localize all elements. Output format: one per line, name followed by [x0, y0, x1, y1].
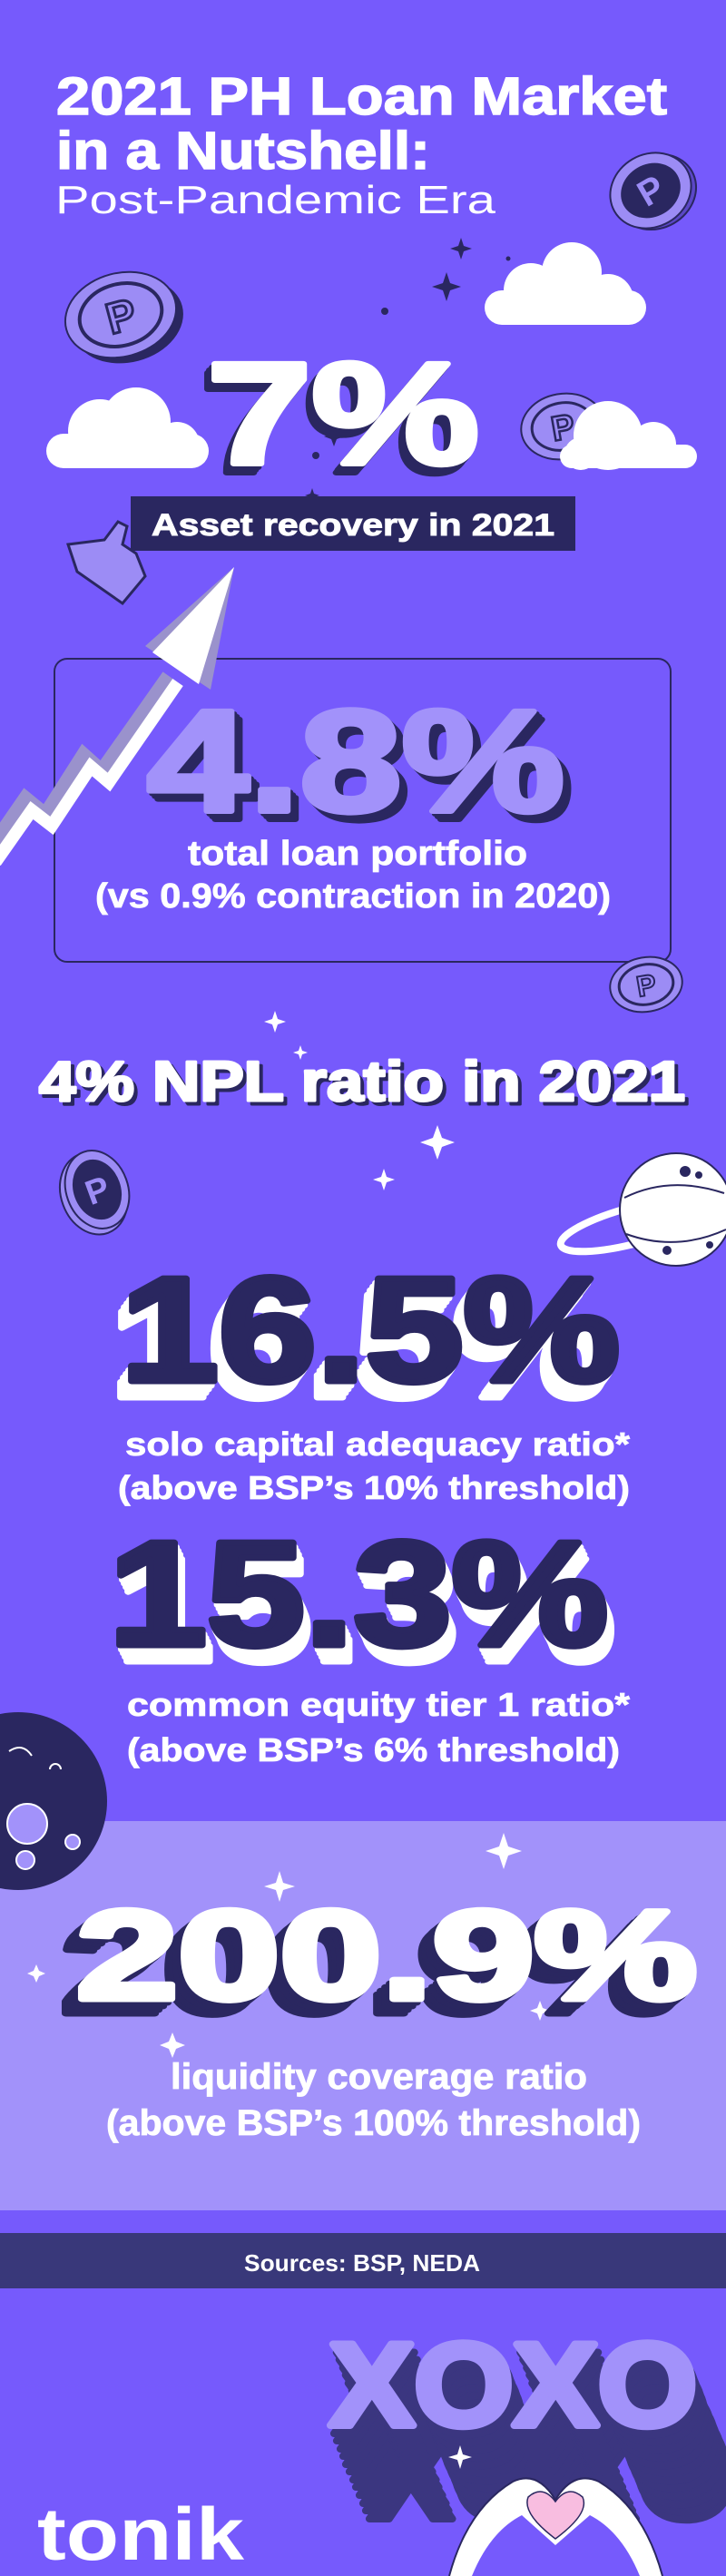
- title: [55, 67, 667, 222]
- XOXO: XOXO: [352, 2373, 720, 2505]
- big stat: 15.3%: 15.3%: [109, 1511, 608, 1677]
- big stat: 16.5%: 16.5%: [118, 1251, 617, 1417]
- big stat: 16.5%: 16.5%: [115, 1255, 614, 1421]
- XOXO: XOXO: [348, 2365, 716, 2497]
- XOXO: [329, 2318, 726, 2544]
- XOXO: XOXO: [355, 2380, 722, 2512]
- icon: sparkles: [264, 1011, 455, 1190]
- big stat: 4.8%: 4.8%: [155, 688, 573, 850]
- title: in a Nutshell:: [56, 122, 430, 181]
- big stat: 4.8%: 4.8%: [150, 682, 567, 845]
- icon: coin left: [55, 259, 193, 377]
- panel: loan portfolio box: [54, 659, 671, 962]
- text: liquidity: (above BSP’s 100% threshold): [106, 2103, 641, 2143]
- label: asset recovery: [131, 496, 575, 551]
- big stat: 16.5%: 16.5%: [121, 1247, 620, 1413]
- sources bar: Sources: BSP, NEDA: [244, 2249, 480, 2277]
- text: CET1: (above BSP’s 6% threshold): [127, 1731, 620, 1768]
- text: solo CAR: (above BSP’s 10% threshold): [118, 1469, 630, 1506]
- big stat: 200.9%: 200.9%: [64, 1895, 684, 2037]
- icon: coin left tilted: [48, 1141, 142, 1244]
- icon: coin bottom right: P: [634, 967, 659, 1004]
- big stat: 200.9%: 200.9%: [73, 1887, 693, 2030]
- XOXO: XOXO: [336, 2334, 703, 2466]
- big stat: 16.5%: 16.5%: [113, 1259, 612, 1425]
- icon: cloud right top: [485, 242, 646, 325]
- big stat: 7%: 7%: [207, 332, 479, 495]
- text: CET1: common equity tier 1 ratio*: [127, 1686, 630, 1723]
- icon: moon: [0, 1712, 107, 1890]
- icon: cloud small right: [560, 401, 697, 470]
- text: loan portfolio: (vs 0.9% contraction in 2020): [95, 877, 611, 916]
- XOXO: XOXO: [333, 2326, 701, 2459]
- title: Post-Pandemic Era: [55, 178, 496, 222]
- icon: thumbs up: [68, 522, 145, 603]
- XOXO: XOXO: [362, 2396, 726, 2529]
- XOXO: XOXO: [339, 2342, 707, 2474]
- arrow: growth: [0, 567, 234, 862]
- big stat: 15.3%: 15.3%: [113, 1519, 612, 1685]
- XOXO: XOXO: [329, 2318, 697, 2451]
- icon: coin left tilted: P: [81, 1170, 115, 1213]
- title: 2021 PH Loan Market: [56, 67, 667, 126]
- icon: coin middle right: P: [548, 407, 577, 449]
- logo: tonik: tonik: [37, 2493, 244, 2576]
- XOXO: XOXO: [358, 2388, 726, 2521]
- XOXO: XOXO: [342, 2349, 710, 2482]
- label: asset recovery: Asset recovery in 2021: [152, 508, 554, 543]
- text: loan portfolio: total loan portfolio: [188, 835, 527, 873]
- big stat: 4.8%: 4.8%: [147, 680, 564, 842]
- heading: NPL ratio: 4% NPL ratio in 2021: [39, 1051, 685, 1113]
- big stat: 7%: 7%: [204, 336, 476, 498]
- big stat: 4.8%: 4.8%: [152, 685, 570, 847]
- XOXO: XOXO: [365, 2404, 726, 2536]
- text: loan portfolio: [95, 835, 611, 916]
- icon: coin left: P: [101, 290, 142, 344]
- text: solo CAR: solo capital adequacy ratio*: [125, 1425, 630, 1463]
- text: CET1: [127, 1686, 630, 1768]
- icon: coin bottom right: [605, 952, 687, 1017]
- icon: coin top right: [596, 136, 710, 246]
- big stat: 15.3%: 15.3%: [114, 1523, 613, 1689]
- icon: sparkles near title: [305, 238, 510, 503]
- icon: sparkles band: [27, 1833, 550, 2058]
- big stat: 15.3%: 15.3%: [111, 1515, 610, 1681]
- text: liquidity: liquidity coverage ratio: [171, 2057, 587, 2097]
- big stat: 15.3%: 15.3%: [116, 1527, 615, 1693]
- big stat: 7%: 7%: [201, 338, 474, 501]
- XOXO: XOXO: [345, 2357, 712, 2490]
- big stat: 7%: 7%: [200, 341, 472, 504]
- icon: planet: [556, 1153, 726, 1266]
- XOXO: XOXO: [368, 2412, 726, 2544]
- big stat: 16.5%: 16.5%: [110, 1263, 609, 1429]
- text: solo CAR: [118, 1425, 630, 1506]
- big stat: 200.9%: [60, 1884, 697, 2041]
- text: liquidity: [106, 2057, 641, 2143]
- icon: sparkle: [448, 2445, 472, 2469]
- icon: cloud left: [46, 387, 209, 468]
- big stat: 200.9%: 200.9%: [76, 1884, 697, 2026]
- big stat: 200.9%: 200.9%: [60, 1898, 681, 2041]
- big stat: 200.9%: 200.9%: [68, 1891, 689, 2033]
- icon: heart hands: [449, 2478, 662, 2576]
- sources bar: [0, 2233, 726, 2288]
- heading: NPL ratio: 4% NPL ratio in 2021: [43, 1054, 689, 1117]
- light band: liquidity: [0, 1821, 726, 2210]
- icon: coin middle right: [515, 387, 610, 465]
- icon: coin top right: P: [631, 168, 672, 215]
